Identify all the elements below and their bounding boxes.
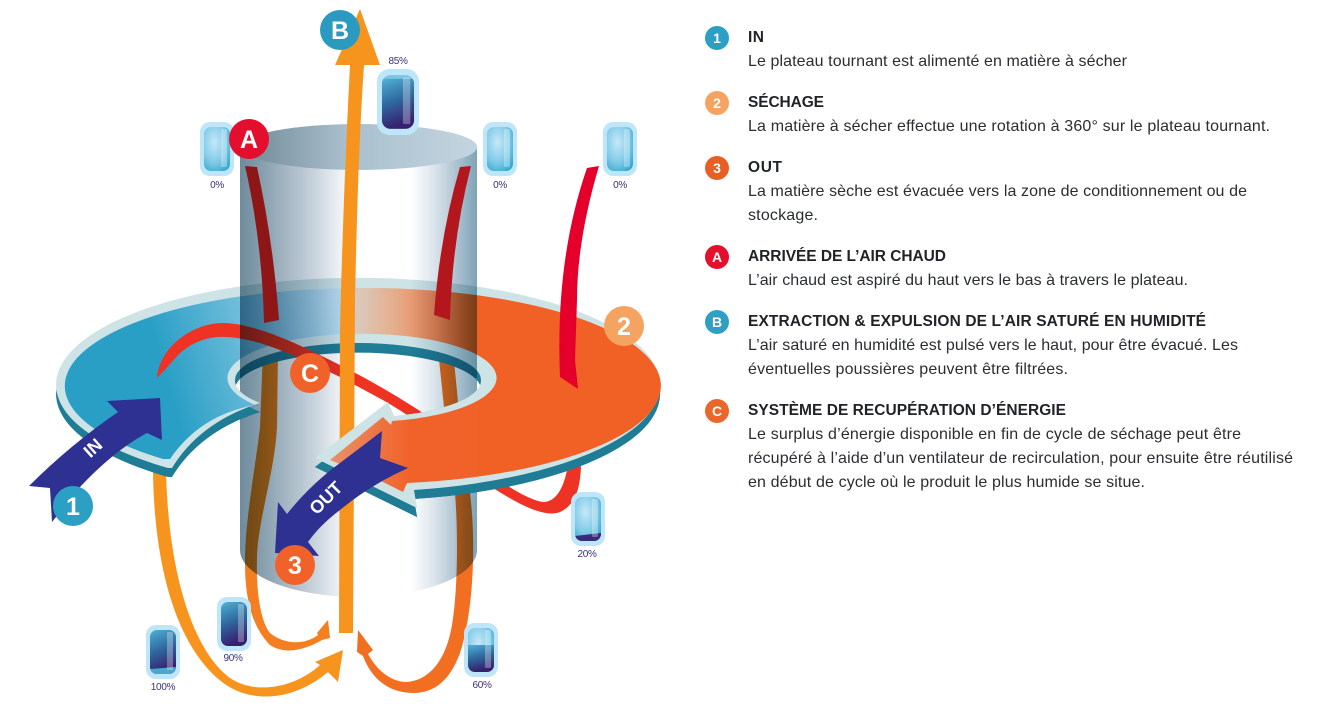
arrow: IN <box>29 398 162 522</box>
legend item 1: 1 <box>713 30 721 46</box>
plateau: front section <box>240 378 477 517</box>
plateau: light border <box>56 278 660 508</box>
legend item 2 <box>705 91 1270 135</box>
humidity gauge 0% right: 0% <box>613 180 627 191</box>
arrow: energy recovery C <box>157 323 423 415</box>
badge 1: 1 <box>66 493 80 521</box>
badge 2: 2 <box>617 313 631 341</box>
arrow: hot air left inside cylinder <box>245 166 279 323</box>
legend item B: L’air saturé en humidité est pulsé vers le haut, pour être évacué. Les <box>748 337 1238 354</box>
arrow: IN: IN <box>80 435 106 461</box>
legend item C: Le surplus d’énergie disponible en fin de cycle de séchage peut être <box>748 426 1241 443</box>
legend item B: B <box>712 314 722 330</box>
legend item 2: SÉCHAGE <box>748 94 824 111</box>
humidity gauge 60%: 60% <box>472 680 492 691</box>
arrow: hot air free right <box>559 166 599 389</box>
legend item C: C <box>712 403 722 419</box>
humidity gauge 90% <box>217 597 251 664</box>
cylinder body <box>240 124 477 597</box>
badge 3: 3 <box>288 552 302 580</box>
legend item 2: 2 <box>713 95 721 111</box>
legend item 1 <box>705 26 1128 70</box>
humidity gauge 0% left: 0% <box>210 180 224 191</box>
arrow: orange inside cylinder left <box>245 350 330 650</box>
arrow: OUT: OUT <box>305 477 347 519</box>
badge A <box>229 119 269 159</box>
badge 1 <box>53 486 93 526</box>
arrow: hot air right inside cylinder <box>434 166 471 320</box>
legend item 3 <box>705 156 1247 224</box>
humidity gauge 0% right <box>603 122 637 191</box>
diagram: rotating dryer <box>29 9 661 697</box>
arrow: large orange recirculation left <box>153 470 343 697</box>
badge C <box>290 353 330 393</box>
badge B <box>320 10 360 50</box>
plateau: blue sector <box>65 288 357 459</box>
plateau: hole back rim <box>228 334 490 380</box>
arrow: OUT <box>275 431 408 556</box>
legend item C: SYSTÈME DE RECUPÉRATION D’ÉNERGIE <box>748 402 1066 419</box>
legend <box>705 26 1293 491</box>
arrow: B exhaust <box>335 9 380 633</box>
legend item 1: IN <box>748 29 764 46</box>
humidity gauge 90%: 90% <box>223 653 243 664</box>
humidity gauge 20% <box>571 492 605 560</box>
plateau: orange sector <box>330 288 661 492</box>
legend item 1: Le plateau tournant est alimenté en matière à sécher <box>748 53 1128 70</box>
badge 2 <box>604 306 644 346</box>
cylinder top <box>240 124 477 170</box>
legend item 2: La matière à sécher effectue une rotation à 360° sur le plateau tournant. <box>748 118 1270 135</box>
legend item B: EXTRACTION & EXPULSION DE L’AIR SATURÉ EN HUMIDITÉ <box>748 313 1206 330</box>
legend item B <box>705 310 1238 378</box>
legend item 3: La matière sèche est évacuée vers la zone de conditionnement ou de <box>748 183 1247 200</box>
legend item 3: 3 <box>713 160 721 176</box>
legend item A <box>705 245 1188 289</box>
legend item 3: OUT <box>748 159 783 176</box>
humidity gauge 100%: 100% <box>151 682 176 693</box>
humidity gauge 60% <box>464 623 498 691</box>
arrow: red under plateau <box>493 466 581 513</box>
humidity gauge 20%: 20% <box>577 549 597 560</box>
legend item 3: stockage. <box>748 207 818 224</box>
legend item B: éventuelles poussières peuvent être filtrées. <box>748 361 1068 378</box>
badge B: B <box>331 17 349 45</box>
legend item C: récupéré à l’aide d’un ventilateur de recirculation, pour ensuite être réutilisé <box>748 450 1293 467</box>
legend item A: L’air chaud est aspiré du haut vers le bas à travers le plateau. <box>748 272 1188 289</box>
humidity gauge 100% <box>146 625 180 693</box>
legend item A: ARRIVÉE DE L’AIR CHAUD <box>748 248 946 265</box>
badge C: C <box>301 360 319 388</box>
legend item A: A <box>712 249 722 265</box>
humidity gauge 0% centre: 0% <box>493 180 507 191</box>
arrow: orange inside cylinder right <box>357 350 473 693</box>
legend item C <box>705 399 1293 491</box>
badge A: A <box>240 126 258 154</box>
badge 3 <box>275 545 315 585</box>
label 85%: 85% <box>388 56 408 67</box>
legend item C: en début de cycle où le produit le plus humide se situe. <box>748 474 1145 491</box>
humidity gauge 0% left <box>200 122 234 191</box>
plateau: teal rim <box>56 287 660 517</box>
humidity gauge 0% centre <box>483 122 517 191</box>
humidity gauge 85% <box>377 69 419 135</box>
